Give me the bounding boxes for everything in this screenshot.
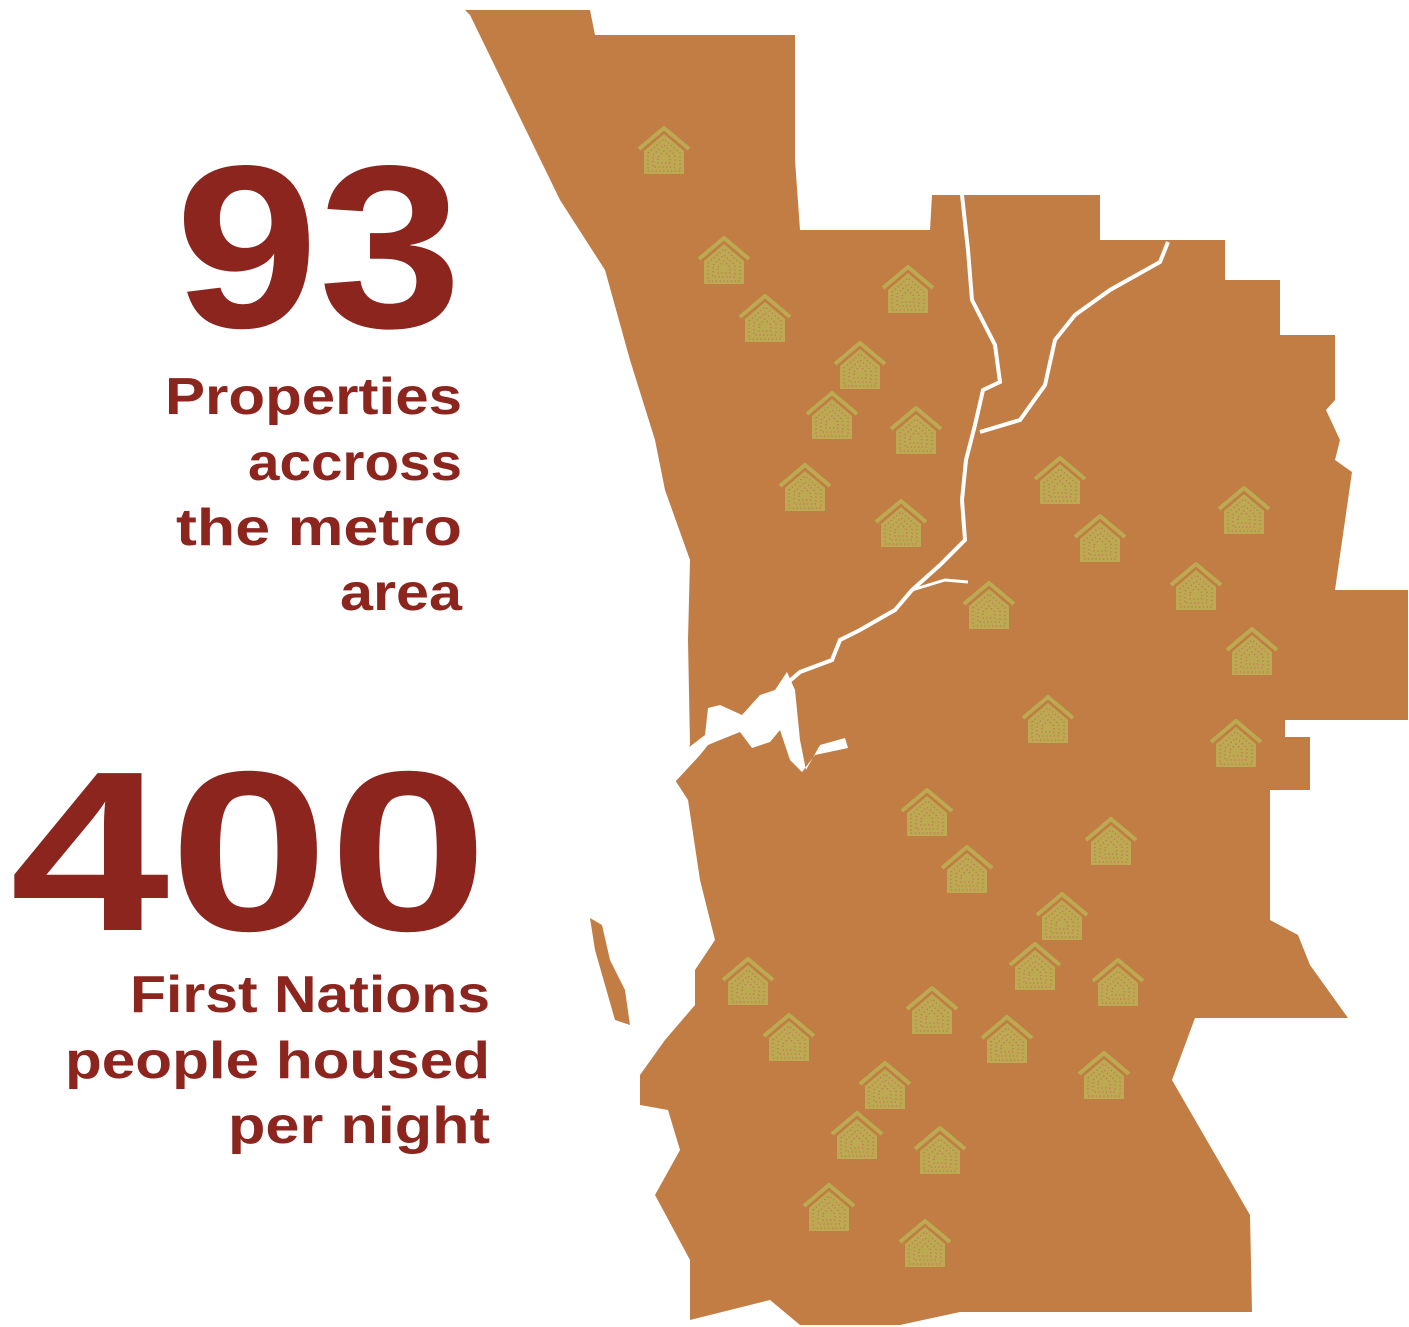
- stat: 93 properties: [165, 118, 463, 622]
- map: metro area: [465, 10, 1408, 1325]
- label: properties across the metro area: [165, 368, 463, 622]
- label: properties across the metro area: area: [340, 564, 463, 622]
- stat: 400 people: 400: [10, 725, 488, 979]
- label: First Nations people housed per night: people housed: [65, 1032, 490, 1090]
- stat: 93 properties: 93: [175, 118, 462, 377]
- label: First Nations people housed per night: [65, 966, 490, 1155]
- house icons: [639, 128, 1277, 1267]
- label: properties across the metro area: the metro: [176, 499, 462, 557]
- stat: 400 people: [10, 725, 490, 1155]
- label: properties across the metro area: accross: [248, 434, 462, 492]
- label: properties across the metro area: Properties: [165, 368, 462, 426]
- label: First Nations people housed per night: First Nations: [130, 966, 490, 1024]
- label: First Nations people housed per night: per night: [228, 1097, 490, 1155]
